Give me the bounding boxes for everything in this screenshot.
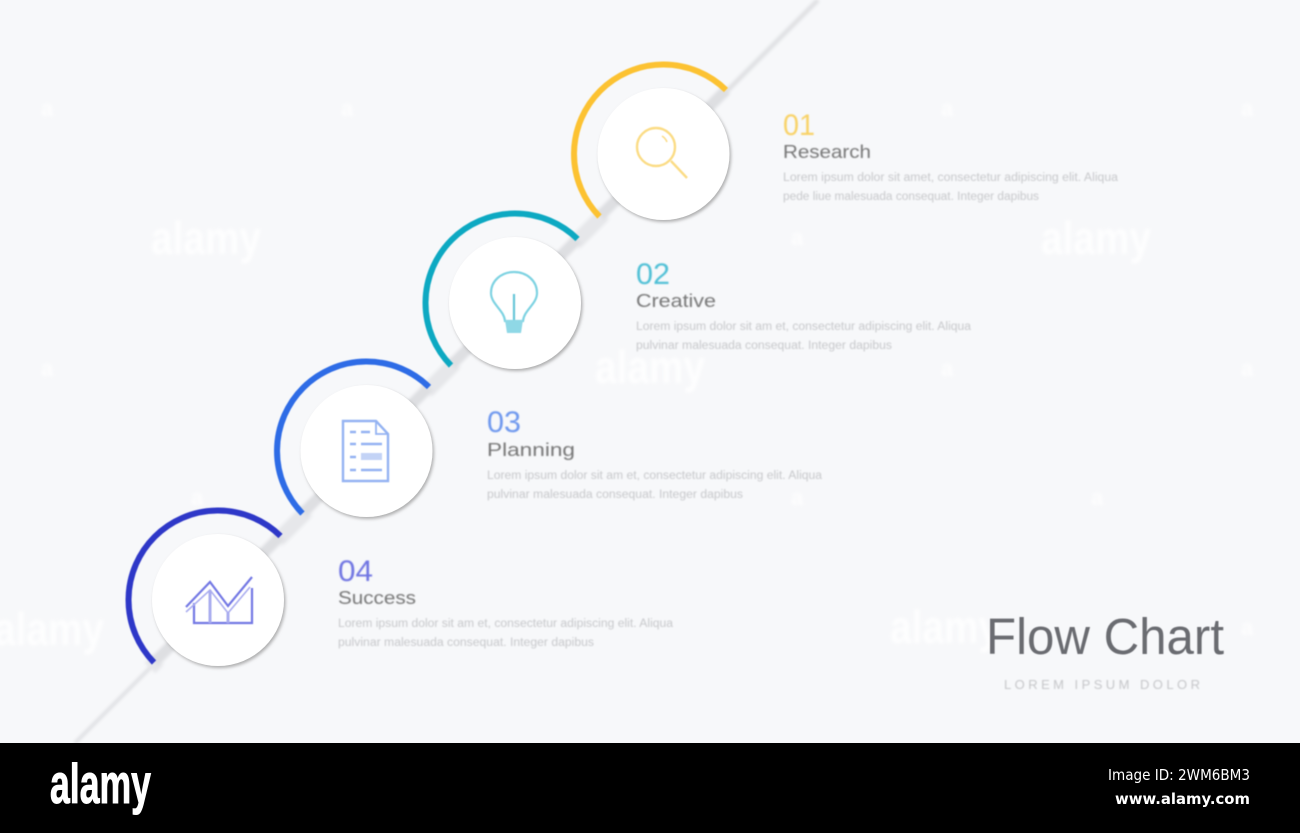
watermarks: a — [1241, 615, 1254, 640]
watermarks: a — [791, 225, 804, 250]
heading Creative: Creative — [636, 291, 716, 311]
inner band 2 — [452, 239, 578, 365]
title: Flow Chart: Flow Chart — [986, 608, 1224, 665]
heading Research: Research — [783, 142, 871, 162]
body text: pulvinar malesuada consequat. Integer dapibus — [338, 637, 594, 649]
number 02: 02 — [636, 258, 670, 291]
watermarks: a — [941, 356, 954, 381]
watermarks: a — [341, 96, 354, 121]
watermarks: alamy — [1041, 212, 1151, 264]
step 2 node — [426, 214, 600, 388]
arc 4 — [129, 511, 280, 662]
watermarks: alamy — [595, 341, 705, 393]
watermarks: a — [1091, 485, 1104, 510]
step 1 node — [574, 65, 748, 239]
arc 2 — [426, 214, 578, 366]
soft ring shade 1 — [578, 69, 748, 239]
number 03: 03 — [487, 406, 521, 439]
icon: light bulb — [491, 272, 537, 333]
watermarks: alamy — [151, 212, 261, 264]
text block: step 2 — [636, 258, 972, 352]
icon: magnifier — [637, 128, 687, 178]
icon: document — [343, 421, 388, 481]
body text: pede liue malesuada consequat. Integer dapibus — [783, 191, 1039, 203]
white circle 1 — [598, 88, 730, 220]
alamy logo: alamy — [50, 752, 151, 815]
inner band 4 — [154, 536, 280, 662]
body text: Lorem ipsum dolor sit am et, consectetur adipiscing elit. Aliqua — [338, 618, 674, 630]
watermarks: a — [41, 356, 54, 381]
step 3 node — [277, 362, 452, 536]
footer bar — [0, 743, 1300, 833]
inner band 3 — [303, 387, 429, 513]
diagonal connector line — [75, 0, 818, 743]
watermarks: a — [941, 96, 954, 121]
white circle 4 — [152, 534, 284, 666]
body text: pulvinar malesuada consequat. Integer dapibus — [636, 340, 892, 352]
body text: Lorem ipsum dolor sit am et, consectetur adipiscing elit. Aliqua — [487, 470, 823, 482]
watermarks: a — [191, 485, 204, 510]
number 04: 04 — [338, 555, 373, 588]
arc 1 — [574, 65, 726, 216]
text block: step 1 — [783, 109, 1119, 203]
text block: step 3 — [487, 406, 823, 501]
subtitle: LOREM IPSUM DOLOR — [1004, 677, 1200, 692]
inner band 1 — [600, 90, 726, 216]
white circle 3 — [300, 385, 432, 517]
text block: step 4 — [338, 555, 674, 649]
white circle 2 — [449, 237, 581, 369]
image id: Image ID: 2WM6BM3 — [1108, 766, 1250, 784]
arc 3 — [277, 362, 429, 514]
watermarks — [0, 96, 1254, 655]
watermarks: a — [1241, 96, 1254, 121]
watermarks: a — [1241, 356, 1254, 381]
soft ring shade 3 — [282, 366, 452, 536]
soft ring shade 2 — [430, 218, 600, 388]
body text: pulvinar malesuada consequat. Integer dapibus — [487, 489, 743, 501]
heading Planning: Planning — [487, 440, 575, 460]
watermarks: a — [791, 485, 804, 510]
icon: growth chart — [186, 577, 252, 623]
website: www.alamy.com — [1115, 790, 1250, 808]
body text: Lorem ipsum dolor sit amet, consectetur adipiscing elit. Aliqua — [783, 172, 1119, 184]
step 4 node — [129, 511, 303, 685]
body text: Lorem ipsum dolor sit am et, consectetur adipiscing elit. Aliqua — [636, 321, 972, 333]
soft ring shade 4 — [133, 515, 303, 685]
watermarks: a — [41, 96, 54, 121]
watermarks: alamy — [890, 601, 1000, 653]
number 01: 01 — [783, 109, 815, 142]
heading Success: Success — [338, 588, 416, 608]
